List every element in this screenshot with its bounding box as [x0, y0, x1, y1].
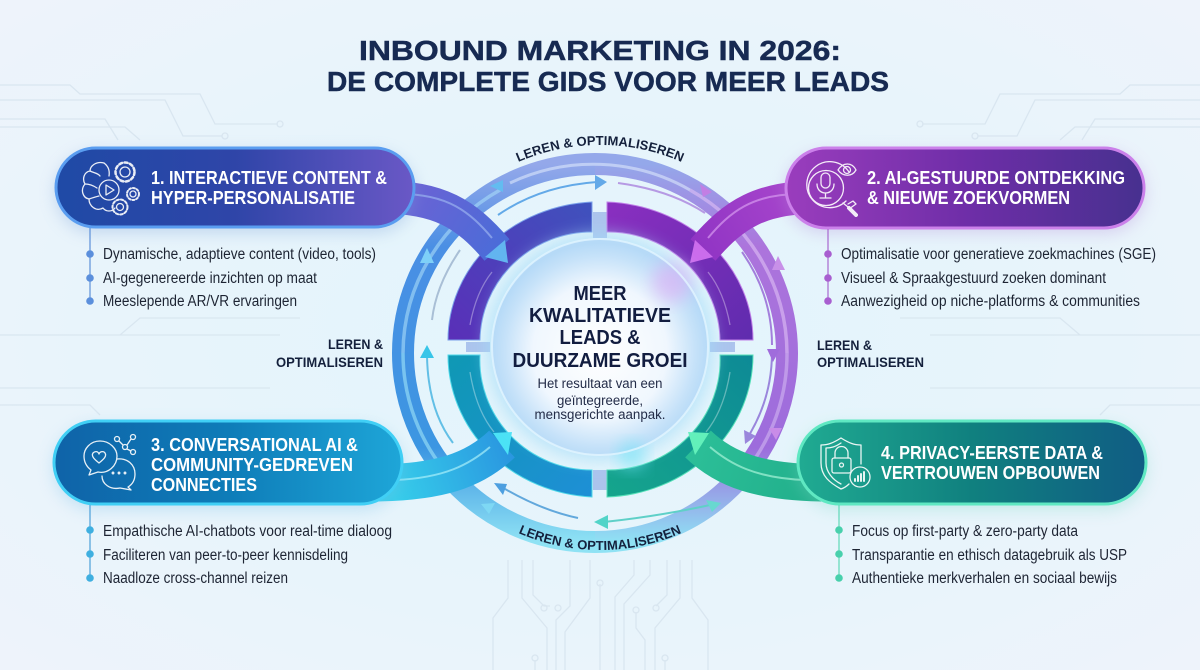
heading 1: 1. INTERACTIEVE CONTENT & [151, 168, 387, 188]
panel: ai discovery [785, 148, 1156, 310]
inner thin flow arcs [420, 175, 785, 529]
heading 3: COMMUNITY-GEDREVEN [151, 455, 353, 475]
centre heading: MEER [574, 283, 627, 305]
heading 4: VERTROUWEN OPBOUWEN [881, 463, 1100, 483]
label: leren left: LEREN & [328, 336, 383, 352]
title: INBOUND MARKETING IN 2026: [359, 35, 841, 66]
bullets 3: Empathische AI-chatbots voor real-time dialoog [103, 523, 392, 540]
label: leren bottom: LEREN & OPTIMALISEREN [519, 525, 681, 550]
bullets 2: Visueel & Spraakgestuurd zoeken dominant [841, 270, 1107, 287]
bullets 2: Optimalisatie voor generatieve zoekmachines (SGE) [841, 246, 1156, 263]
outer feedback ring [403, 164, 787, 542]
bullets 3 [86, 505, 392, 587]
pill 1 [56, 148, 414, 227]
heading 4: 4. PRIVACY-EERSTE DATA & [881, 443, 1103, 463]
label: leren right [817, 337, 924, 370]
centre subtext: geïntegreerde, [557, 393, 643, 408]
title [327, 35, 889, 97]
bullets 4: Transparantie en ethisch datagebruik als USP [852, 547, 1127, 564]
title: DE COMPLETE GIDS VOOR MEER LEADS [327, 66, 889, 97]
curved arrow: panel 3 to centre [370, 432, 512, 483]
curved arrow: panel 4 to centre [688, 432, 830, 483]
bullets 3: Faciliteren van peer-to-peer kennisdeling [103, 547, 348, 564]
centre subtext: Het resultaat van een [538, 376, 662, 391]
panel: privacy first [797, 421, 1147, 587]
curved arrow: panel 2 to centre [690, 194, 820, 263]
heading 3 [151, 435, 358, 495]
heading 3: CONNECTIES [151, 475, 257, 495]
label: leren top: LEREN & OPTIMALISEREN [516, 136, 684, 162]
label: leren right: LEREN & [817, 337, 872, 353]
panel: interactive content [55, 148, 415, 310]
heading 2 [867, 168, 1125, 208]
heading 1 [151, 168, 387, 208]
curved arrow: panel 1 to centre [380, 194, 508, 263]
central result circle [486, 233, 714, 470]
icon: chat bubbles with heart and network [84, 434, 136, 490]
centre heading [512, 283, 688, 372]
centre subtext: mensgerichte aanpak. [534, 407, 666, 422]
label: leren left: OPTIMALISEREN [276, 354, 383, 370]
bullets 1: Meeslepende AR/VR ervaringen [103, 293, 297, 310]
inner ring segments [448, 202, 753, 497]
icon: search with microphone and eye [807, 162, 857, 215]
bullets 1: Dynamische, adaptieve content (video, tools) [103, 246, 376, 263]
bullets 4: Authentieke merkverhalen en sociaal bewijs [852, 570, 1117, 587]
bullets 1: AI-gegenereerde inzichten op maat [103, 270, 318, 287]
bullets 2 [824, 229, 1156, 310]
centre subtext [534, 376, 666, 422]
pill 4 [798, 421, 1146, 504]
icon: brain with gears [82, 162, 139, 214]
icon: shield with lock and chart [821, 438, 870, 489]
pill 2 [786, 148, 1144, 228]
heading 2: & NIEUWE ZOEKVORMEN [867, 188, 1070, 208]
heading 3: 3. CONVERSATIONAL AI & [151, 435, 358, 455]
panel: conversational ai [53, 421, 403, 587]
label: leren left [276, 336, 383, 370]
heading 4 [881, 443, 1103, 483]
bullets 3: Naadloze cross-channel reizen [103, 570, 288, 587]
bullets 4 [835, 505, 1127, 587]
bullets 2: Aanwezigheid op niche-platforms & communities [841, 293, 1140, 310]
bullets 1 [86, 228, 376, 310]
centre heading: DUURZAME GROEI [512, 350, 688, 372]
heading 2: 2. AI-GESTUURDE ONTDEKKING [867, 168, 1125, 188]
heading 1: HYPER-PERSONALISATIE [151, 188, 355, 208]
pill 3 [54, 421, 402, 504]
label: leren right: OPTIMALISEREN [817, 354, 924, 370]
centre heading: KWALITATIEVE [529, 305, 671, 327]
centre heading: LEADS & [560, 327, 640, 349]
bullets 4: Focus op first-party & zero-party data [852, 523, 1078, 540]
